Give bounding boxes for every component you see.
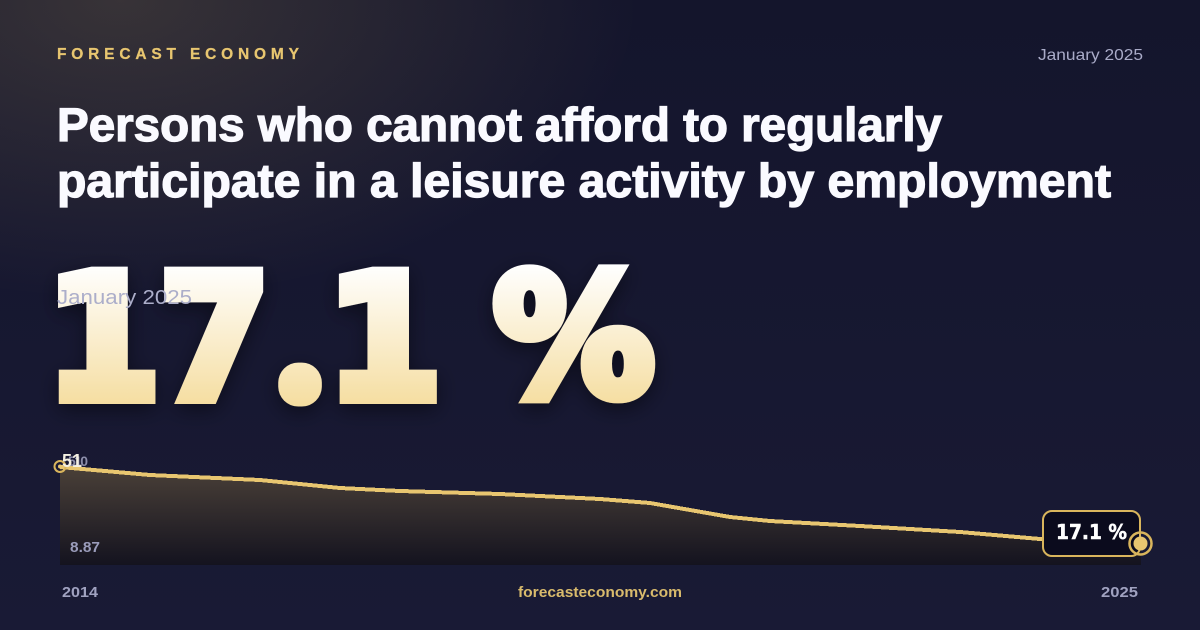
date overlay label: January 2025 (57, 286, 192, 309)
axis max label: 510 (68, 453, 88, 469)
brand label: FORECAST ECONOMY (57, 46, 300, 63)
title: Persons who cannot afford to regularly (57, 98, 942, 151)
big value: 1 (45, 239, 161, 439)
big value: 7 (159, 240, 270, 439)
chart area (60, 467, 1141, 565)
big value (45, 239, 655, 440)
first value label: 51 (62, 451, 82, 471)
axis min label: 8.87 (70, 540, 100, 556)
date top right: January 2025 (1038, 47, 1143, 64)
chart line (60, 467, 1141, 543)
value callout: 17.1 % (1056, 520, 1127, 544)
x axis end year: 2025 (1101, 584, 1138, 601)
title: participate in a leisure activity by employment (57, 154, 1111, 207)
title (57, 98, 1111, 207)
line chart (54, 451, 1152, 565)
big value: . (296, 368, 304, 392)
value callout (1043, 511, 1140, 556)
source url: forecasteconomy.com (518, 584, 682, 601)
end marker (1130, 532, 1152, 554)
big value: % (493, 239, 655, 435)
big value: 1 (326, 239, 443, 440)
x axis start year: 2014 (62, 584, 99, 601)
start marker (54, 461, 66, 472)
